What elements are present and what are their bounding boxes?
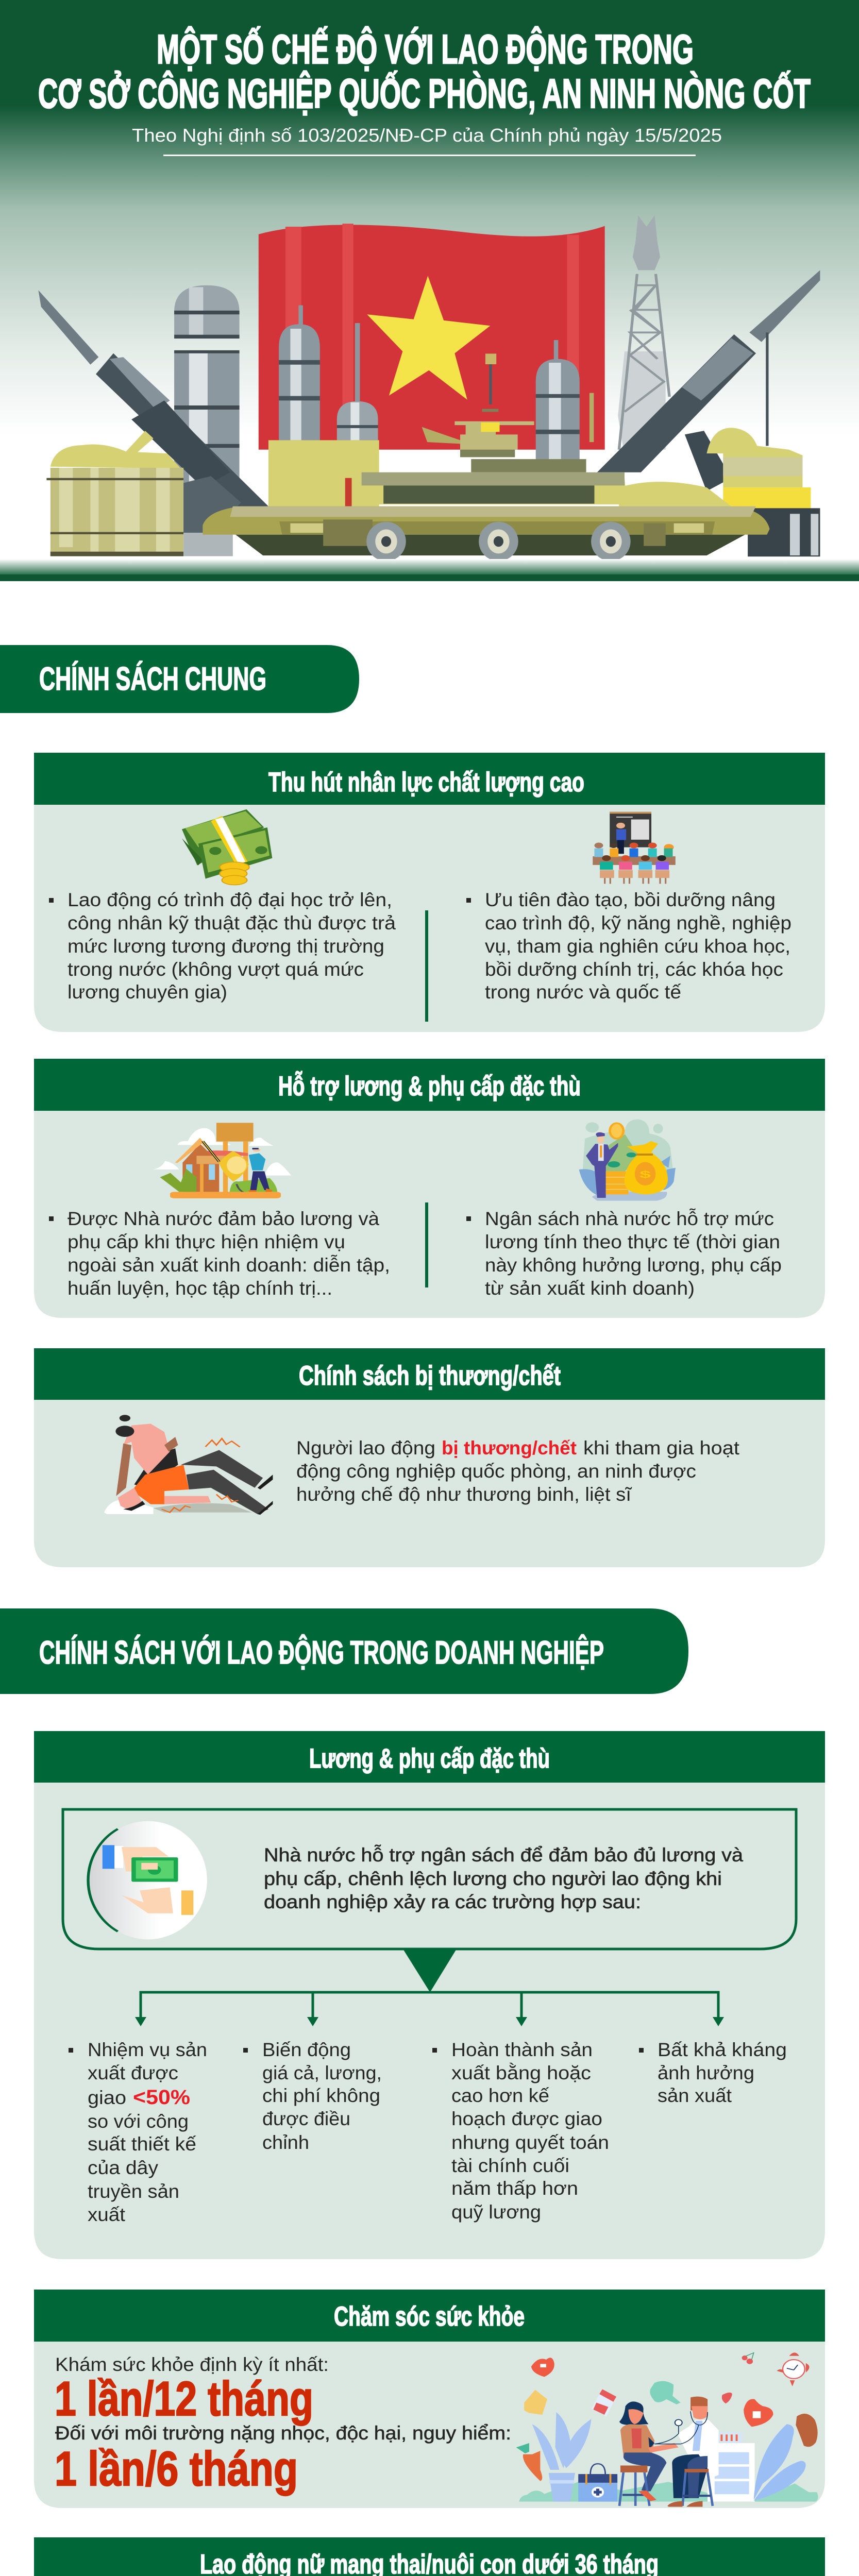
- text: callout: [264, 1844, 743, 1912]
- missile left: [174, 285, 240, 504]
- text: case 3: hoạch được giao: [451, 2108, 602, 2129]
- text: right bullet: cao trình độ, kỹ năng nghề, nghiệp: [485, 912, 791, 934]
- text: injury policy: khi tham gia hoạt: [583, 1437, 740, 1459]
- missile centre right: [536, 340, 580, 461]
- panel: attract quality staff: Thu hút nhân lực chất lượng cao: [268, 767, 584, 798]
- text: left bullet: huấn luyện, học tập chính trị...: [68, 1278, 332, 1299]
- text: case 2: giá cả, lương,: [262, 2062, 382, 2083]
- panel: salary and special allowance: [34, 1059, 825, 1318]
- panel: salary and special allowance: Hỗ trợ lương & phụ cấp đặc thù: [278, 1071, 581, 1101]
- text: case 2: chi phí không: [262, 2085, 380, 2106]
- text: case 3: nhưng quyết toán: [451, 2132, 609, 2153]
- text: left bullet: Được Nhà nước đảm bảo lương và: [68, 1208, 379, 1229]
- flag: [259, 224, 605, 450]
- title underline: [163, 155, 696, 156]
- text: right bullet: trong nước và quốc tế: [485, 981, 681, 1003]
- text: injury policy: Người lao động: [296, 1437, 435, 1459]
- text: hazardous environments: Đối với môi trường nặng nhọc, độc hại, nguy hiểm:: [55, 2422, 511, 2444]
- icon: businessman and money bag: [579, 1120, 676, 1201]
- icon: doctor and patient: [516, 2352, 818, 2507]
- panel: health care: Chăm sóc sức khỏe: [334, 2301, 525, 2332]
- text: callout: phụ cấp, chênh lệch lương cho người lao động khi: [264, 1868, 722, 1889]
- crates: [46, 428, 820, 556]
- section heading: general policy: [0, 645, 359, 713]
- text: right bullet: từ sản xuất kinh doanh): [485, 1278, 695, 1299]
- text: case 3: năm thấp hơn: [451, 2178, 578, 2199]
- text: case 2: được điều: [262, 2108, 350, 2129]
- text: left bullet: phụ cấp khi thực hiện nhiệm vụ: [68, 1231, 345, 1252]
- text: case 1: so với công: [88, 2111, 189, 2132]
- text: right bullet: vụ, tham gia nghiên cứu khoa học,: [485, 936, 790, 957]
- missile centre left: [279, 306, 378, 440]
- right gun: [597, 270, 820, 491]
- text: case 4: Bất khả kháng: [658, 2039, 787, 2060]
- text: case 1: xuất: [88, 2204, 126, 2225]
- text: injury policy: động công nghiệp quốc phòng, an ninh được: [296, 1461, 696, 1482]
- text: case 3: quỹ lương: [451, 2201, 541, 2223]
- text: case 4: ảnh hưởng: [658, 2062, 754, 2083]
- text: case 2: chỉnh: [262, 2132, 309, 2153]
- text: left bullet: công nhân kỹ thuật đặc thù được trả: [68, 912, 396, 934]
- text: case 1: giao: [88, 2087, 126, 2108]
- text: left bullet: Lao động có trình độ đại học trở lên,: [68, 889, 392, 910]
- icon: injured worker: [104, 1415, 273, 1515]
- text: case 2: Biến động: [262, 2039, 351, 2060]
- text: case 1: truyền sản: [88, 2181, 179, 2202]
- section heading: workers in enterprises: CHÍNH SÁCH VỚI LAO ĐỘNG TRONG DOANH NGHIỆP: [39, 1634, 604, 1671]
- panel: health care: [34, 2290, 825, 2508]
- text: right bullet: bồi dưỡng chính trị, các khóa học: [485, 959, 783, 980]
- figure: once every 6 months: 1 lần/6 tháng: [55, 2442, 298, 2496]
- tower: [618, 215, 669, 450]
- callout box: [63, 1809, 796, 1949]
- panel: salary and allowance in enterprises: Lương & phụ cấp đặc thù: [309, 1743, 550, 1774]
- text: case 1: xuất được: [88, 2062, 178, 2083]
- panel: pregnant and nursing female workers: [34, 2537, 825, 2576]
- yellow box and turret mast: [268, 353, 594, 508]
- panel: injury or death policy: [34, 1348, 825, 1567]
- text: injury policy: hưởng chế độ như thương binh, liệt sĩ: [296, 1484, 632, 1505]
- text: case 3: Hoàn thành sản: [451, 2039, 593, 2060]
- text: callout: Nhà nước hỗ trợ ngân sách để đảm bảo đủ lương và: [264, 1844, 743, 1866]
- text: right bullet: [466, 889, 791, 1003]
- header illustration: flag, missiles, guns and tank: [38, 215, 820, 561]
- figure: once every 12 months: 1 lần/12 tháng: [55, 2371, 313, 2426]
- text: case 3: cao hơn kế: [451, 2085, 549, 2106]
- icon: classroom: [593, 812, 676, 884]
- text: left bullet: trong nước (không vượt quá mức: [68, 959, 364, 980]
- panel: injury or death policy: Chính sách bị thương/chết: [299, 1361, 561, 1391]
- left gun: [38, 290, 268, 533]
- text: callout: doanh nghiệp xảy ra các trường hợp sau:: [264, 1891, 641, 1912]
- text: right bullet: Ưu tiên đào tạo, bồi dưỡng nâng: [485, 889, 776, 910]
- text: left bullet: ngoài sản xuất kinh doanh: diễn tập,: [68, 1255, 390, 1276]
- icon: businessman and money bag: $: [639, 1168, 651, 1180]
- arrows: branching tree: [135, 1949, 724, 2026]
- panel: salary and allowance in enterprises: [34, 1731, 825, 2259]
- header background: [0, 0, 859, 581]
- text: case 1: suất thiết kế: [88, 2133, 196, 2155]
- text: right bullet: này không hưởng lương, phụ cấp: [485, 1255, 782, 1276]
- subtitle: Theo Nghị định số 103/2025/NĐ-CP của Chính phủ ngày 15/5/2025: [132, 125, 722, 146]
- section heading: general policy: CHÍNH SÁCH CHUNG: [39, 661, 266, 697]
- text: case 1: Nhiệm vụ sản: [88, 2039, 207, 2060]
- section heading: workers in enterprises: [0, 1608, 688, 1694]
- text: case 4: sản xuất: [658, 2085, 732, 2106]
- text: left bullet: [49, 889, 396, 1003]
- text: right bullet: [466, 1208, 782, 1299]
- text: case 3: xuất bằng hoặc: [451, 2062, 591, 2083]
- text: case 2: [243, 2039, 382, 2153]
- text: right bullet: lương tính theo thực tế (thời gian: [485, 1231, 780, 1252]
- icon: hands and money: [88, 1821, 207, 1939]
- icon: money stack: [182, 809, 272, 885]
- text: injury policy: bị thương/chết: [442, 1437, 577, 1459]
- tank: [203, 472, 770, 561]
- title: [38, 26, 811, 116]
- text: left bullet: mức lương tương đương thị trường: [68, 936, 384, 957]
- text: right bullet: Ngân sách nhà nước hỗ trợ mức: [485, 1208, 774, 1229]
- text: case 1: của dây: [88, 2157, 159, 2178]
- panel: attract quality staff: [34, 753, 825, 1032]
- header bottom band: [0, 559, 859, 574]
- icon: house and worker: [153, 1123, 291, 1198]
- text: case 3: tài chính cuối: [451, 2155, 569, 2176]
- text: left bullet: [49, 1208, 390, 1299]
- text: case 3: [432, 2039, 609, 2223]
- text: case 1: <50%: [133, 2086, 190, 2109]
- text: case 4: [639, 2039, 787, 2106]
- text: case 1: [69, 2039, 207, 2225]
- text: injury policy: [296, 1437, 740, 1505]
- text: periodic check-up: Khám sức khỏe định kỳ ít nhất:: [55, 2354, 329, 2375]
- text: left bullet: lương chuyên gia): [68, 981, 227, 1003]
